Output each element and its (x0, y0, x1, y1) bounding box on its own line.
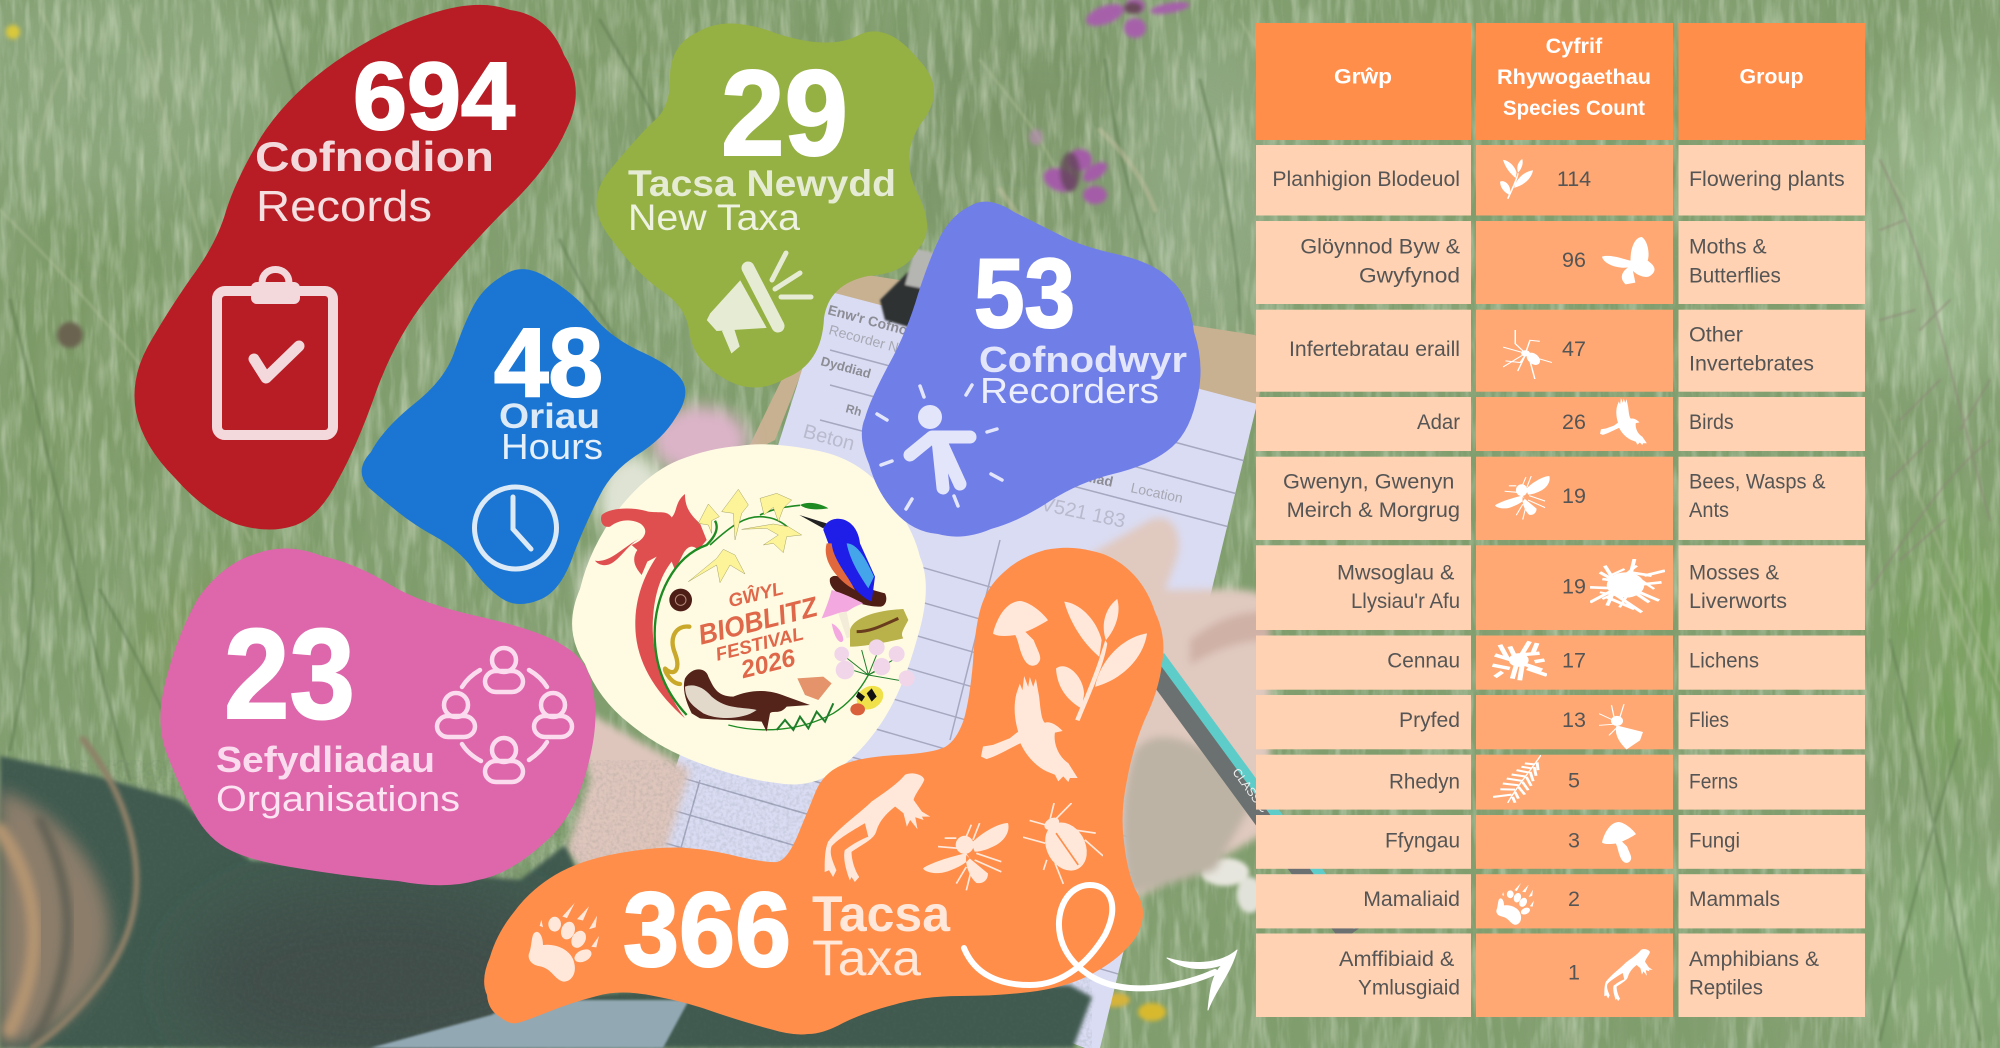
row: amphibians and reptiles (1256, 934, 1865, 1017)
row: lichens: Cennau (1387, 648, 1460, 672)
row: moths and butterflies: Butterflies (1689, 263, 1781, 287)
row: lichens: 17 (1562, 648, 1586, 672)
row: amphibians and reptiles: Amffibiaid & (1339, 947, 1454, 971)
row: flies: Pryfed (1399, 708, 1460, 732)
icon: person with rays (877, 385, 1002, 509)
panel: organisations (160, 548, 595, 885)
row: bees, wasps and ants: 19 (1562, 484, 1586, 508)
row: bees, wasps and ants: Gwenyn, Gwenyn (1283, 470, 1454, 494)
row: moths and butterflies: Moths & (1689, 234, 1767, 258)
panel: taxa (484, 548, 1163, 1034)
row: ferns (1256, 755, 1865, 810)
row: flowering plants: 114 (1557, 167, 1591, 191)
row: ferns: Rhedyn (1389, 769, 1460, 793)
icon: clipboard with check (217, 270, 333, 435)
row: mammals: 2 (1568, 887, 1580, 911)
icon: bee (923, 823, 1009, 890)
row: moths and butterflies: Gwyfynod (1359, 263, 1460, 287)
picnic blanket and white cloth (582, 406, 748, 630)
row: mosses and liverworts: Liverworts (1689, 589, 1787, 613)
panel: records (134, 5, 576, 530)
sweater (0, 756, 1092, 1048)
row: mosses and liverworts: 19 (1562, 574, 1586, 598)
table header: Cyfrif (1546, 35, 1603, 58)
row: fungi: Ffyngau (1385, 828, 1460, 852)
pencil (1152, 656, 1358, 935)
row: mosses and liverworts (1256, 545, 1865, 630)
logo wording: BIOBLITZ (695, 591, 821, 651)
label Oriau: Oriau (499, 397, 600, 436)
logo otter (684, 669, 810, 732)
logo wording: GŴYL (726, 577, 785, 611)
festival logo badge (572, 444, 926, 784)
panel: hours (362, 269, 685, 604)
row: bees, wasps and ants (1256, 457, 1865, 540)
clipboard paper: Dyddiad (819, 353, 873, 381)
row: flies: 13 (1562, 708, 1586, 732)
row: flowering plants: Flowering plants (1689, 167, 1845, 191)
number 29: 29 (721, 45, 848, 181)
row: flies (1256, 695, 1865, 750)
row: mosses and liverworts: Mosses & (1689, 560, 1779, 584)
arrow: looped arrow pointing to table (964, 885, 1237, 1010)
label Tacsa: Tacsa (812, 886, 951, 942)
row: bees, wasps and ants: Bees, Wasps & (1689, 470, 1826, 494)
label Organisations: Organisations (216, 778, 460, 819)
row: bees, wasps and ants: Ants (1689, 498, 1729, 522)
label Sefydliadau: Sefydliadau (216, 739, 435, 780)
row: ferns: 5 (1568, 769, 1580, 793)
icon: clock (474, 487, 556, 569)
row: mammals: Mammals (1689, 887, 1780, 911)
logo yellow orchids (688, 489, 802, 583)
label Taxa: Taxa (812, 930, 921, 986)
icon: beetle (1023, 803, 1103, 884)
row: bees, wasps and ants: Meirch & Morgrug (1287, 498, 1460, 522)
hair (0, 739, 136, 1048)
row: moths and butterflies: Glöynnod Byw & (1300, 234, 1460, 258)
number 366: 366 (623, 871, 791, 989)
logo frog (850, 609, 908, 647)
panel: recorders (862, 202, 1201, 537)
panel: new taxa (596, 23, 934, 388)
clipboard paper: Enw'r Cofnod (826, 301, 918, 340)
row: fungi (1256, 815, 1865, 869)
jeans patch (370, 1000, 689, 1048)
logo butterfly (797, 677, 832, 700)
row: fungi: 3 (1568, 828, 1580, 852)
row: other invertebrates: Invertebrates (1689, 352, 1814, 376)
row: moths and butterflies (1256, 221, 1865, 304)
label Cofnodion: Cofnodion (255, 133, 494, 180)
row: birds (1256, 397, 1865, 451)
icon: bird (981, 676, 1078, 782)
row: flowering plants (1256, 145, 1865, 216)
icon: megaphone (708, 253, 811, 351)
pencil: CLASSIC (1230, 766, 1271, 816)
clipboard paper: Location (1129, 479, 1184, 506)
table of species counts (1256, 23, 1865, 1017)
row: mosses and liverworts: Llysiau'r Afu (1351, 589, 1460, 613)
logo kingfisher (799, 515, 886, 607)
label Recorders: Recorders (980, 370, 1159, 411)
clipboard paper: ollad (1079, 467, 1115, 490)
icon: circle of people (437, 648, 572, 782)
logo snail (669, 589, 692, 611)
icon: frog (825, 773, 930, 882)
table header: Grŵp (1334, 66, 1392, 88)
row: lichens (1256, 636, 1865, 690)
clipboard metal clip (880, 248, 938, 332)
row: other invertebrates: Other (1689, 322, 1743, 346)
row: amphibians and reptiles: 1 (1568, 961, 1580, 985)
clipboard paper: Rh (844, 401, 863, 419)
clipboard paper: Beton (801, 421, 857, 455)
logo wording (695, 577, 821, 684)
icon: plant sprig (1056, 599, 1147, 721)
icon: mushroom (993, 601, 1048, 666)
clipboard board (745, 270, 1266, 455)
table header: Group (1740, 66, 1804, 88)
clipboard paper: V521 183 (1039, 493, 1127, 533)
row: amphibians and reptiles: Ymlusgiaid (1358, 976, 1460, 1000)
logo beetle (850, 681, 888, 715)
row: mammals: Mamaliaid (1363, 887, 1460, 911)
row: fungi: Fungi (1689, 828, 1740, 852)
row: other invertebrates (1256, 310, 1865, 392)
row: amphibians and reptiles: Reptiles (1689, 976, 1763, 1000)
meadow flowers (6, 0, 1263, 1021)
logo toadstool (822, 590, 863, 642)
logo lizard (665, 627, 689, 684)
table header: Rhywogaethau (1497, 66, 1651, 89)
label New Taxa: New Taxa (628, 197, 800, 238)
label Records: Records (256, 182, 432, 231)
row: mosses and liverworts: Mwsoglau & (1337, 560, 1454, 584)
row: flies: Flies (1689, 708, 1729, 732)
row: birds: Birds (1689, 410, 1734, 434)
row: flowering plants: Planhigion Blodeuol (1272, 167, 1460, 191)
logo wording: FESTIVAL (713, 623, 806, 665)
row: other invertebrates: Infertebratau eraill (1289, 337, 1460, 361)
row: mammals (1256, 874, 1865, 928)
row: amphibians and reptiles: Amphibians & (1689, 947, 1819, 971)
row: lichens: Lichens (1689, 648, 1759, 672)
label Cofnodwyr: Cofnodwyr (979, 339, 1187, 380)
row: birds: 26 (1562, 410, 1586, 434)
table header (1256, 23, 1865, 140)
logo plume (595, 494, 707, 718)
row: other invertebrates: 47 (1562, 337, 1586, 361)
clipboard paper: Recorder N (827, 321, 901, 355)
table header: Species Count (1503, 97, 1645, 120)
logo leaf (800, 503, 828, 509)
row: ferns: Ferns (1689, 769, 1738, 793)
number 53: 53 (974, 238, 1075, 348)
row: birds: Adar (1417, 410, 1460, 434)
icon: paw (529, 903, 599, 982)
label Tacsa Newydd: Tacsa Newydd (628, 163, 896, 204)
row: moths and butterflies: 96 (1562, 248, 1586, 272)
logo wording: 2026 (737, 645, 798, 684)
logo stems (655, 505, 868, 730)
logo hogweed blossoms (834, 639, 915, 686)
logo plant sprig (777, 703, 833, 730)
clipboard paper (620, 291, 1260, 1048)
hands holding the clipboard (566, 518, 1270, 900)
number 23: 23 (224, 603, 355, 746)
label Hours: Hours (501, 426, 603, 467)
number 694: 694 (353, 43, 515, 150)
number 48: 48 (494, 308, 603, 417)
